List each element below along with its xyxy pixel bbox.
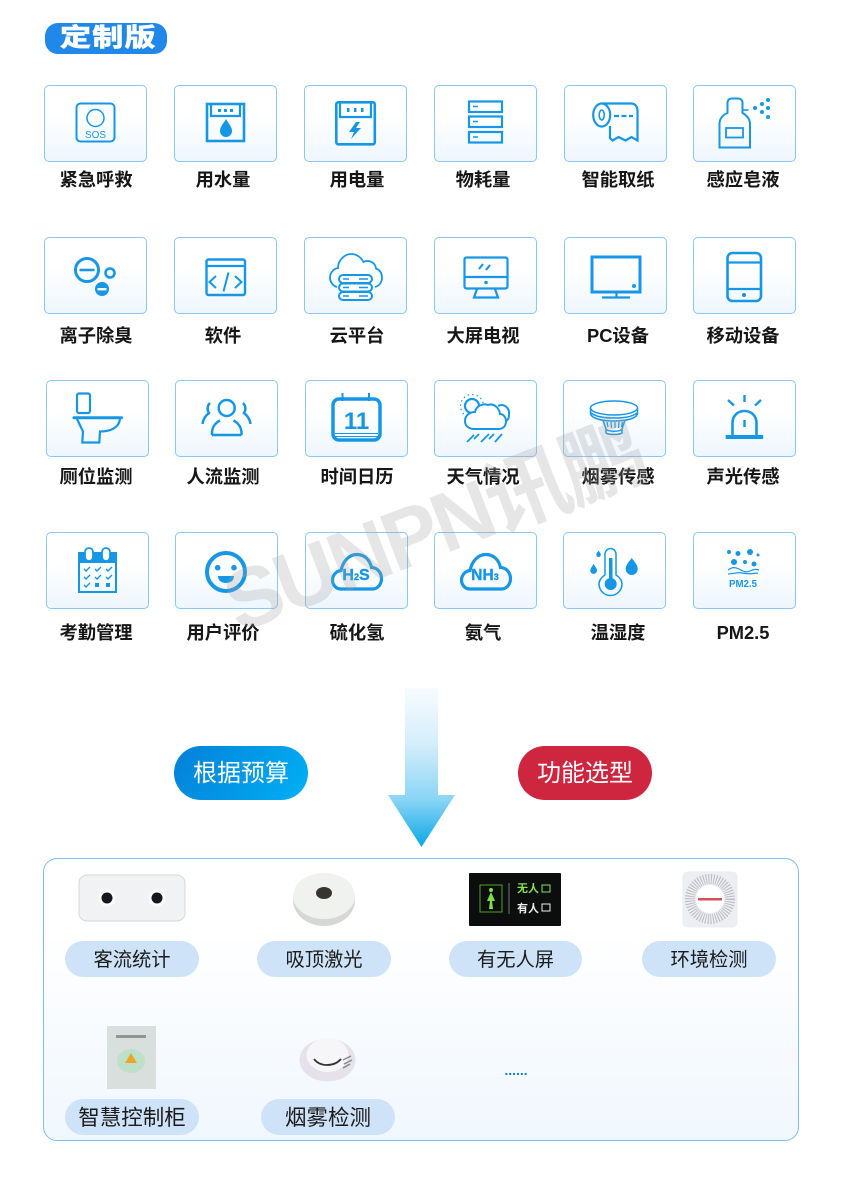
tag: 智慧控制柜 bbox=[65, 1099, 199, 1135]
card: 感应皂液 bbox=[693, 85, 796, 162]
tag: 有无人屏: 有无人屏 bbox=[477, 950, 554, 971]
button: 根据预算: 根据预算 bbox=[193, 760, 289, 787]
icon: cloud servers bbox=[329, 253, 383, 301]
label: 大屏电视: 大屏电视 bbox=[446, 325, 520, 346]
icon: pc monitor bbox=[590, 256, 642, 299]
card: 氨气 bbox=[434, 532, 537, 609]
product: occupancy screen bbox=[469, 873, 561, 926]
icon: code window bbox=[205, 258, 246, 296]
card: 天气情况 bbox=[434, 380, 537, 457]
label: 紧急呼救: 紧急呼救 bbox=[59, 169, 133, 190]
icon: PM2.5 particles: PM2.5 bbox=[729, 579, 758, 590]
label: 声光传感: 声光传感 bbox=[706, 466, 780, 487]
icon: tablet phone bbox=[726, 252, 762, 302]
label: 烟雾传感: 烟雾传感 bbox=[581, 466, 655, 487]
label: 离子除臭: 离子除臭 bbox=[59, 325, 133, 346]
card: 紧急呼救 bbox=[44, 85, 147, 162]
tag: 吸顶激光 bbox=[257, 941, 391, 977]
card: 烟雾传感 bbox=[563, 380, 666, 457]
icon: attendance calendar bbox=[78, 547, 117, 593]
button: 根据预算 bbox=[174, 746, 308, 800]
label: 用水量: 用水量 bbox=[196, 169, 250, 190]
product: occupancy screen: 有人 bbox=[517, 901, 539, 915]
product: ceiling laser bbox=[293, 873, 355, 926]
button: 功能选型: 功能选型 bbox=[537, 760, 633, 787]
card: 云平台 bbox=[304, 237, 407, 314]
card: 大屏电视 bbox=[434, 237, 537, 314]
tag: 客流统计: 客流统计 bbox=[93, 950, 171, 971]
label: 氨气: 氨气 bbox=[465, 622, 501, 643]
icon: paper roll bbox=[592, 102, 639, 142]
card: 人流监测 bbox=[175, 380, 278, 457]
heading: 定制版: 定制版 bbox=[60, 24, 157, 52]
icon: water meter bbox=[206, 102, 246, 142]
label: 云平台: 云平台 bbox=[330, 325, 384, 346]
icon: H2S cloud: H2S bbox=[342, 567, 370, 584]
product: control cabinet bbox=[107, 1026, 156, 1089]
product: environment sensor bbox=[682, 872, 738, 928]
icon: ions bbox=[74, 257, 116, 296]
tag: 烟雾检测: 烟雾检测 bbox=[285, 1106, 371, 1130]
card: 离子除臭 bbox=[44, 237, 147, 314]
button: 功能选型 bbox=[518, 746, 652, 800]
icon: calendar 11: 11 bbox=[344, 408, 369, 435]
label: 温湿度: 温湿度 bbox=[591, 622, 645, 643]
card: 智能取纸 bbox=[564, 85, 667, 162]
icon: SOS button bbox=[76, 102, 116, 142]
card: 移动设备 bbox=[693, 237, 796, 314]
icon: electric meter bbox=[335, 101, 376, 146]
product: occupancy screen: 无人 bbox=[517, 882, 539, 895]
tag: 智慧控制柜: 智慧控制柜 bbox=[78, 1106, 186, 1130]
label: 物耗量: 物耗量 bbox=[456, 169, 510, 190]
label: PM2.5: PM2.5 bbox=[717, 622, 769, 643]
label: 用电量: 用电量 bbox=[330, 169, 384, 190]
icon: SOS button: SOS bbox=[85, 130, 106, 141]
icon: toilet bbox=[72, 392, 123, 444]
card: 声光传感 bbox=[693, 380, 796, 457]
label: 考勤管理: 考勤管理 bbox=[59, 622, 133, 643]
card: 温湿度 bbox=[563, 532, 666, 609]
card: PM2.5 bbox=[693, 532, 796, 609]
icon: alarm beacon bbox=[726, 395, 764, 439]
label: 智能取纸: 智能取纸 bbox=[581, 169, 655, 190]
tag: 客流统计 bbox=[65, 941, 199, 977]
icon: calendar 11 bbox=[331, 393, 382, 442]
card: 时间日历 bbox=[305, 380, 408, 457]
icon: people bbox=[201, 398, 252, 436]
label: 感应皂液: 感应皂液 bbox=[706, 169, 780, 190]
text: more ellipsis: ...... bbox=[504, 1062, 528, 1078]
card: 考勤管理 bbox=[46, 532, 149, 609]
tag: 烟雾检测 bbox=[261, 1099, 395, 1135]
product: people counter camera bbox=[78, 874, 186, 922]
icon: NH3 cloud: NH3 bbox=[471, 567, 499, 584]
card: 用户评价 bbox=[175, 532, 278, 609]
tag: 环境检测: 环境检测 bbox=[670, 950, 748, 971]
label: 时间日历: 时间日历 bbox=[320, 466, 394, 487]
watermark: SUNPN 讯鹏: SUNPN讯鹏 bbox=[211, 404, 657, 650]
icon: soap sprayer bbox=[718, 98, 770, 148]
label: 人流监测: 人流监测 bbox=[186, 466, 260, 487]
tag: 环境检测 bbox=[642, 941, 776, 977]
tag: 有无人屏 bbox=[449, 941, 582, 977]
label: 天气情况: 天气情况 bbox=[446, 466, 520, 487]
icon: H2S cloud bbox=[330, 552, 384, 591]
arrow: down gradient arrow bbox=[388, 688, 455, 847]
icon: PM2.5 particles bbox=[727, 549, 760, 590]
label: PC设备: PC设备 bbox=[587, 325, 649, 346]
card: 软件 bbox=[174, 237, 277, 314]
label: 用户评价: 用户评价 bbox=[186, 622, 260, 643]
card: 厕位监测 bbox=[46, 380, 149, 457]
card: 硫化氢 bbox=[305, 532, 408, 609]
icon: weather bbox=[460, 394, 510, 443]
icon: thermometer drops bbox=[590, 548, 638, 596]
label: 厕位监测: 厕位监测 bbox=[59, 466, 133, 487]
tag: 吸顶激光: 吸顶激光 bbox=[285, 950, 363, 971]
label: 软件: 软件 bbox=[205, 325, 241, 346]
icon: stacked trays bbox=[468, 100, 504, 144]
label: 硫化氢: 硫化氢 bbox=[330, 622, 384, 643]
label: 移动设备: 移动设备 bbox=[706, 325, 780, 346]
icon: smoke sensor bbox=[590, 400, 638, 436]
card: 用水量 bbox=[174, 85, 277, 162]
card: 用电量 bbox=[304, 85, 407, 162]
icon: NH3 cloud bbox=[460, 552, 512, 591]
icon: smiley bbox=[205, 551, 247, 593]
card: 物耗量 bbox=[434, 85, 537, 162]
icon: desktop monitor bbox=[463, 256, 509, 299]
card: PC设备 bbox=[564, 237, 667, 314]
product: smoke detector bbox=[300, 1040, 356, 1082]
panel: products bbox=[43, 858, 799, 1141]
